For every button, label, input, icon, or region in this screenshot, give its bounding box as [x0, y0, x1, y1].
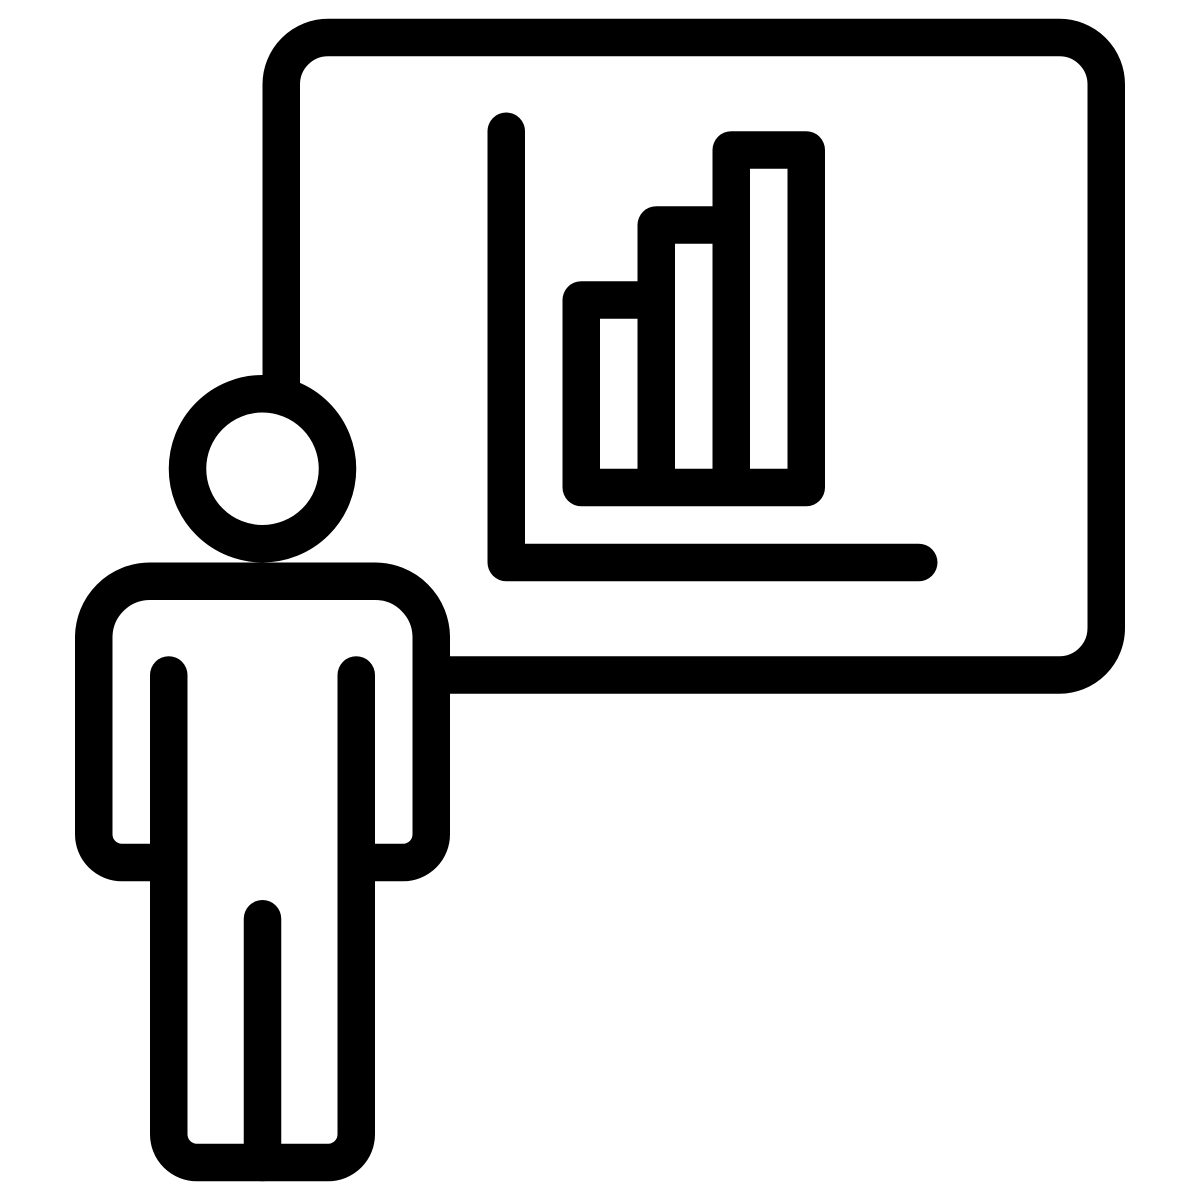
person body	[94, 581, 431, 1162]
presentation board	[281, 38, 1106, 675]
person head	[188, 394, 338, 544]
chart bars	[581, 150, 806, 488]
chart axes	[506, 131, 919, 562]
